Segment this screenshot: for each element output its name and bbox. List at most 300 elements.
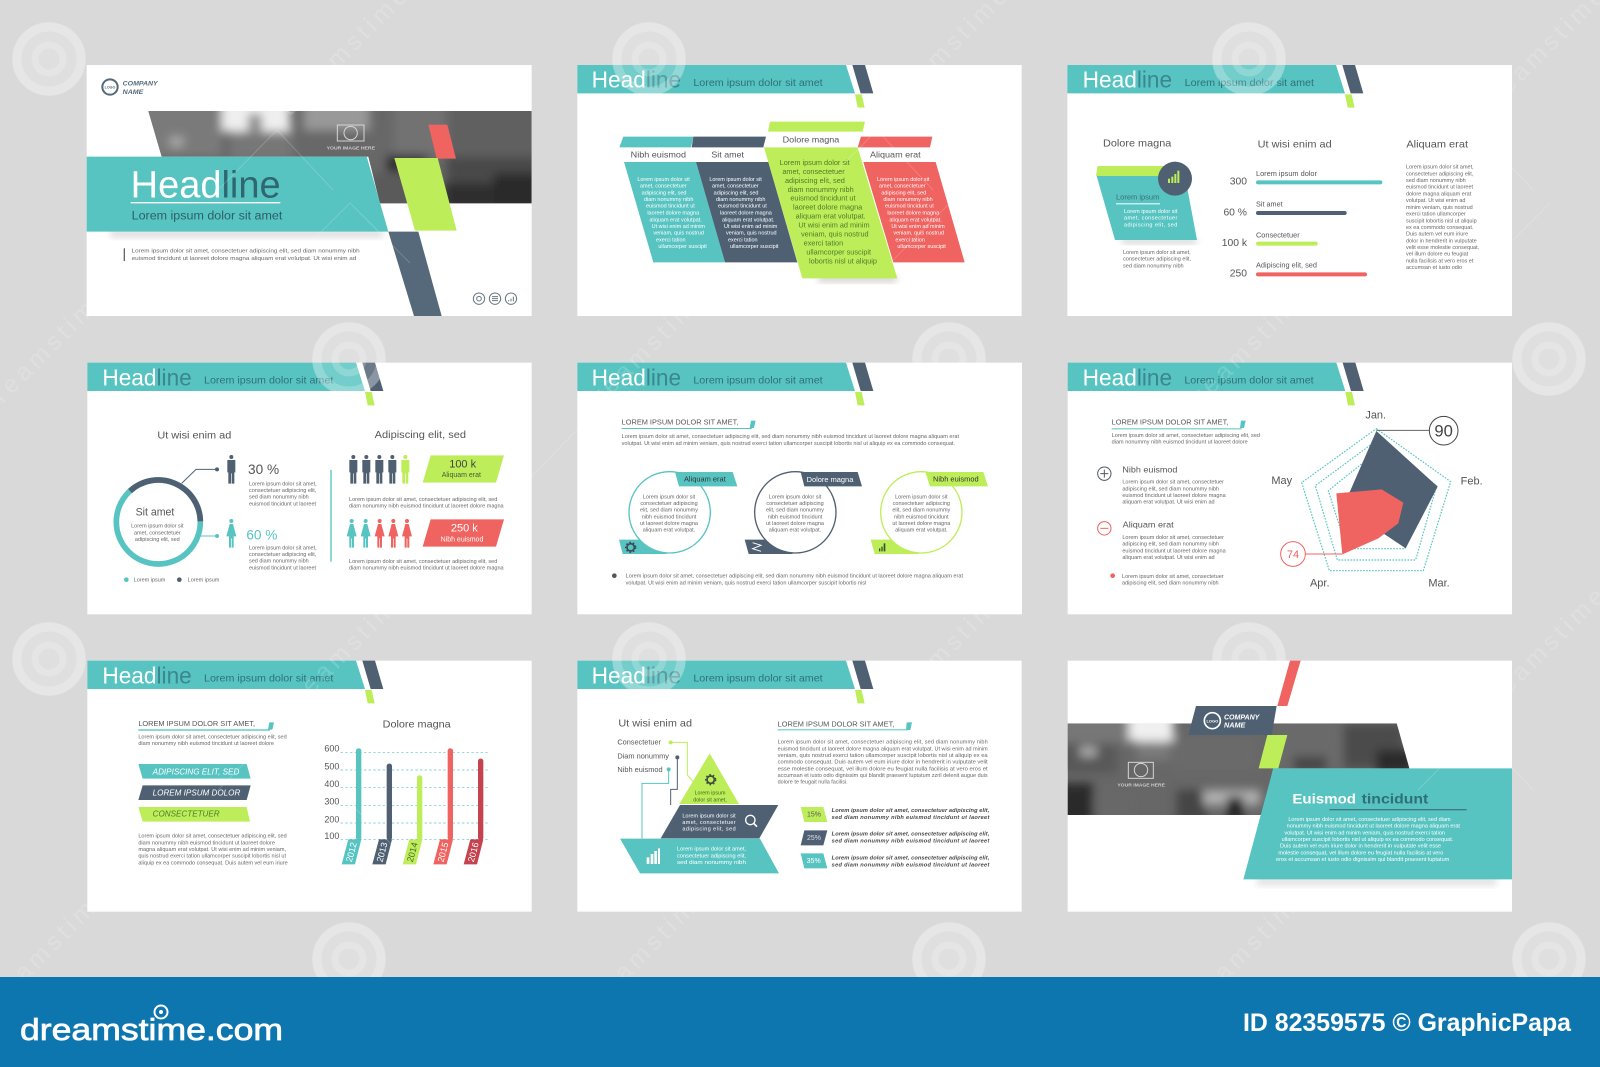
body text: Lorem ipsum dolor sit amet, consectetuer adipiscing elit, sed diam nonummy nibh bbox=[778, 740, 988, 746]
item: minus: Lorem ipsum dolor sit amet, consectetuer bbox=[1122, 535, 1224, 541]
body text column: consectetuer adipiscing elit, bbox=[1406, 171, 1474, 177]
header: Headline bbox=[592, 364, 681, 390]
body text bbox=[138, 834, 288, 866]
bullet note: adipiscing elit, sed diam nonummy nibh bbox=[1122, 581, 1219, 587]
column: green highlighted: euismod tincidunt ut bbox=[790, 194, 856, 203]
logo: company name bbox=[102, 79, 158, 96]
icon row: males bbox=[349, 455, 409, 484]
logo tag bbox=[1188, 706, 1277, 735]
column: dark: ullamcorper suscipit bbox=[730, 244, 779, 250]
circle card: green: Lorem ipsum dolor sit bbox=[895, 494, 948, 500]
footnote bbox=[612, 573, 963, 587]
donut center text: adipiscing elit, sed bbox=[135, 537, 180, 543]
body text: accumsan et iusto odio dignissim qui blandit praesent luptatum zzril delenit augue duis bbox=[778, 773, 988, 779]
circle card: teal bbox=[619, 472, 737, 554]
header bbox=[577, 661, 873, 703]
column: green highlighted: ullamcorper suscipit bbox=[806, 247, 871, 256]
icon: male figure 30% bbox=[227, 455, 235, 484]
text under males bbox=[349, 497, 505, 510]
header bbox=[577, 65, 873, 108]
headings: Dolore magna bbox=[1103, 139, 1172, 150]
photo placeholder bbox=[148, 111, 532, 204]
icons: three round badges bbox=[473, 293, 517, 304]
column: dark: Ut wisi enim ad minim bbox=[724, 224, 778, 230]
callout: 250 k: 250 k bbox=[451, 523, 478, 535]
circle card: dark: elit, sed diam nonummy bbox=[766, 508, 824, 514]
headings: Ut wisi enim ad bbox=[1258, 140, 1332, 151]
bar chart: 400 bbox=[324, 779, 339, 789]
panel: pyramid slide bbox=[577, 661, 1022, 912]
header: Headline bbox=[1083, 364, 1172, 390]
text under females: Lorem ipsum dolor sit amet, consectetuer adipiscing elit, sed bbox=[349, 559, 497, 565]
column: teal: veniam, quis nostrud bbox=[653, 231, 704, 237]
section heading: LOREM IPSUM DOLOR SIT AMET, bbox=[138, 719, 255, 728]
body text column: dolore magna aliquam erat bbox=[1406, 191, 1472, 197]
column: red: euismod tincidunt ut bbox=[885, 204, 934, 210]
donut center text: Sit amet bbox=[136, 507, 174, 519]
radar chart: 74 bbox=[1287, 549, 1299, 561]
footer credit: ID 82359575 © GraphicPapa bbox=[1243, 1009, 1572, 1037]
headings: Ut wisi enim ad bbox=[157, 430, 232, 441]
header: Headline bbox=[102, 662, 192, 688]
circle card: teal: aliquam erat volutpat. bbox=[643, 528, 696, 534]
item: plus: aliquam erat volutpat. Ut wisi enim ad bbox=[1122, 500, 1215, 506]
percent row 35%: sed diam nonummy nibh euismod tincidunt ut laoreet bbox=[832, 862, 990, 868]
teal headline band bbox=[87, 157, 388, 232]
percent row 35%: Lorem ipsum dolor sit amet, consectetuer adipiscing elit, bbox=[832, 855, 990, 861]
pyramid middle bbox=[661, 805, 778, 838]
pyramid labels: Nibh euismod bbox=[617, 765, 663, 774]
circle card: dark: Lorem ipsum dolor sit bbox=[769, 494, 822, 500]
ribbon labels: CONSECTETUER bbox=[153, 808, 220, 818]
header: Headline bbox=[592, 662, 681, 688]
column labels: Nibh euismod bbox=[631, 150, 686, 160]
pyramid labels: Consectetuer bbox=[617, 737, 661, 746]
header: Lorem ipsum dolor sit amet bbox=[693, 674, 823, 685]
donut center text: amet, consectetuer bbox=[134, 530, 181, 536]
bar chart: 250 bbox=[1230, 269, 1247, 280]
radar chart: May bbox=[1271, 475, 1293, 487]
icon: camera: YOUR IMAGE HERE bbox=[327, 146, 375, 151]
column: dark: euismod tincidunt ut bbox=[718, 204, 767, 210]
footnote: Lorem ipsum dolor sit amet, consectetuer adipiscing elit, sed diam nonummy nibh euismod tincidunt ut laoreet dolore magna aliquam erat bbox=[626, 574, 963, 580]
teal panel: Lorem ipsum dolor sit amet, consectetuer adipiscing elit, sed diam bbox=[1288, 817, 1451, 823]
body text: dolore te feugait nulla facilisi. bbox=[778, 780, 848, 786]
column: red: Lorem ipsum dolor sit bbox=[877, 177, 930, 183]
item: minus bbox=[1098, 520, 1227, 561]
panel: progress bars slide bbox=[1067, 65, 1512, 316]
header: Headline bbox=[1083, 67, 1172, 93]
column: teal: Lorem ipsum dolor sit bbox=[637, 177, 690, 183]
text under females: diam nonummy nibh euismod tincidunt ut laoreet dolore magna bbox=[349, 566, 505, 572]
panel: closing slide bbox=[1057, 661, 1512, 912]
circle card: green: aliquam erat volutpat. bbox=[895, 528, 948, 534]
bullet note bbox=[1110, 573, 1224, 587]
percent row 25%: Lorem ipsum dolor sit amet, consectetuer adipiscing elit, bbox=[832, 832, 990, 838]
radar chart bbox=[1271, 409, 1483, 590]
callout card: adipiscing elit, sed bbox=[1124, 222, 1177, 228]
connector lines bbox=[642, 740, 693, 838]
teal panel: Duis autem vel eum iriure dolor in hendrerit in vulputate velit esse bbox=[1280, 844, 1441, 850]
circle card: dark bbox=[745, 472, 862, 554]
column labels bbox=[631, 135, 921, 160]
column: red: amet, consectetuer bbox=[879, 184, 926, 190]
bar chart: 200 bbox=[324, 814, 339, 824]
column: green highlighted: laoreet dolore magna bbox=[793, 203, 863, 212]
body text column: ex ea commodo consequat. bbox=[1406, 225, 1474, 231]
donut chart bbox=[116, 467, 219, 564]
intro text: Lorem ipsum dolor sit amet, consectetuer adipiscing elit, sed diam nonummy nibh euismod tincidunt ut laoreet dolore magna aliquam erat bbox=[622, 434, 959, 440]
bar chart: 2015 bbox=[436, 841, 450, 863]
circle card: dark: nibh euismod tincidunt bbox=[768, 514, 823, 520]
section heading: LOREM IPSUM DOLOR SIT AMET, bbox=[1112, 418, 1228, 427]
radar chart: Mar. bbox=[1428, 578, 1450, 590]
vertical divider bbox=[330, 470, 332, 562]
note text: sed diam nonummy nibh bbox=[1123, 263, 1184, 269]
body text column: Duis autem vel eum iriure bbox=[1406, 232, 1468, 238]
body text: Lorem ipsum dolor sit amet, consectetuer adipiscing elit, sed bbox=[138, 834, 287, 840]
header bbox=[577, 363, 873, 405]
callout card: Lorem ipsum bbox=[1116, 195, 1160, 202]
column: green highlighted: adipiscing elit, sed bbox=[785, 176, 845, 185]
pyramid bottom: consectetuer adipiscing elit, bbox=[677, 853, 746, 859]
text under males: diam nonummy nibh euismod tincidunt ut laoreet dolore magna bbox=[349, 504, 505, 510]
column: green highlighted: exerci tation bbox=[804, 238, 843, 247]
column labels: Sit amet bbox=[711, 150, 745, 160]
item: minus: euismod tincidunt ut laoreet dolore magna bbox=[1122, 548, 1227, 554]
column: teal: exerci tation bbox=[656, 237, 686, 243]
footnote: volutpat. Ut wisi enim ad minim veniam, quis nostrud exerci tation ullamcorper suscipit lobortis nisl bbox=[626, 581, 866, 587]
logo tag: LOGO bbox=[1206, 718, 1218, 723]
body text column: exerci tation ullamcorper bbox=[1406, 212, 1466, 218]
column: green highlighted: diam nonummy nibh bbox=[788, 185, 854, 194]
column: teal: diam nonummy nibh bbox=[644, 197, 693, 203]
radar chart: Feb. bbox=[1461, 475, 1483, 487]
body text: aliquip ex ea commodo consequat. Duis autem vel eum iriure bbox=[138, 860, 288, 866]
body text: diam nonummy nibh euismod tincidunt ut laoreet dolore bbox=[138, 840, 275, 846]
percent row 35% bbox=[801, 853, 990, 868]
column: red: diam nonummy nibh bbox=[883, 197, 933, 203]
callout: 100 k bbox=[423, 455, 504, 483]
pyramid labels: Diam nonummy bbox=[617, 752, 669, 761]
icon: female figure 60% bbox=[226, 519, 236, 548]
callout card: Lorem ipsum dolor sit bbox=[1124, 209, 1178, 215]
section heading: LOREM IPSUM DOLOR SIT AMET, bbox=[778, 719, 894, 728]
column labels: Aliquam erat bbox=[870, 150, 921, 160]
header: Lorem ipsum dolor sit amet bbox=[693, 78, 823, 89]
bar chart: Adipiscing elit, sed bbox=[1256, 263, 1317, 270]
chart heading: Dolore magna bbox=[383, 720, 451, 731]
green accent bbox=[394, 158, 457, 231]
circle card: dark: aliquam erat volutpat. bbox=[769, 528, 822, 534]
callout card: amet, consectetuer bbox=[1124, 216, 1178, 222]
column: red: veniam, quis nostrud bbox=[893, 231, 944, 237]
bar chart: 100 k bbox=[1222, 238, 1248, 249]
card shadow bbox=[1122, 239, 1197, 243]
bar chart: 2016 bbox=[466, 841, 481, 863]
icon: camera: YOUR IMAGE HERE bbox=[1117, 783, 1165, 788]
radar chart: 90 bbox=[1434, 422, 1453, 441]
panel: four column slide bbox=[577, 65, 1022, 316]
item: plus bbox=[1098, 464, 1227, 506]
legend: Lorem ipsum bbox=[134, 578, 166, 584]
column: teal bbox=[624, 162, 725, 262]
footer band bbox=[0, 977, 1600, 1067]
red accent bbox=[1277, 661, 1301, 706]
watermark overlay: dreamstime bbox=[274, 583, 413, 721]
headings: Aliquam erat bbox=[1406, 140, 1468, 151]
header: Headline bbox=[592, 67, 681, 93]
logo: company name: COMPANY bbox=[123, 80, 158, 87]
circle card: dark: Dolore magna bbox=[807, 475, 854, 484]
panel: people statistics slide bbox=[87, 363, 532, 614]
watermark overlay: dreamstime bbox=[574, 283, 713, 421]
icon row: females bbox=[347, 519, 412, 548]
header bbox=[1067, 65, 1363, 108]
stat 60% bbox=[246, 527, 317, 571]
dark diagonal stripe bbox=[388, 232, 442, 316]
bar chart: 300 bbox=[1230, 177, 1247, 188]
section heading: LOREM IPSUM DOLOR SIT AMET, bbox=[622, 418, 738, 427]
headings bbox=[157, 430, 466, 441]
item: minus: adipiscing elit, sed diam nonummy nibh bbox=[1122, 542, 1219, 548]
circle card: teal: Lorem ipsum dolor sit bbox=[643, 494, 696, 500]
column: dark: veniam, quis nostrud bbox=[726, 231, 777, 237]
intro text: Lorem ipsum dolor sit amet, consectetuer adipiscing elit, sed bbox=[138, 734, 287, 740]
percent row 15%: sed diam nonummy nibh euismod tincidunt ut laoreet bbox=[832, 815, 990, 821]
percent row 15%: 15% bbox=[807, 812, 821, 819]
intro text: diam nonummy nibh euismod tincidunt ut laoreet dolore bbox=[138, 741, 274, 747]
item: plus: euismod tincidunt ut laoreet dolore magna bbox=[1122, 493, 1227, 499]
green accent bbox=[1259, 735, 1287, 768]
teal panel: nonummy nibh euismod tincidunt ut laoreet dolore magna aliquam erat bbox=[1287, 824, 1460, 830]
bar chart: 300 bbox=[324, 797, 339, 807]
header: Lorem ipsum dolor sit amet bbox=[1185, 78, 1314, 89]
text under females bbox=[349, 559, 505, 572]
percent row 15% bbox=[801, 807, 990, 822]
column: teal: euismod tincidunt ut bbox=[646, 204, 695, 210]
panel: column chart slide bbox=[87, 661, 532, 912]
column shadow bbox=[818, 276, 897, 282]
column: red bbox=[863, 162, 965, 262]
body text: esse molestie consequat, vel illum dolore eu feugiat nulla facilisis at vero eros et bbox=[778, 766, 988, 772]
photo placeholder bbox=[1068, 723, 1410, 815]
ribbon labels: LOREM IPSUM DOLOR bbox=[153, 788, 240, 798]
intro text bbox=[1112, 433, 1260, 446]
footer logo: dreamstime.com bbox=[20, 1012, 283, 1047]
bar chart: 500 bbox=[324, 761, 339, 771]
title: Headline bbox=[131, 164, 281, 206]
circle card: teal: elit, sed diam nonummy bbox=[640, 508, 698, 514]
header: Headline bbox=[102, 364, 192, 390]
circle card: dark: ut laoreet dolore magna bbox=[766, 521, 825, 527]
stat 30% bbox=[248, 462, 317, 507]
intro text bbox=[124, 248, 360, 262]
circle card: green bbox=[871, 472, 988, 554]
column: teal: ullamcorper suscipit bbox=[658, 244, 707, 250]
bar chart: Sit amet bbox=[1256, 202, 1283, 209]
pyramid bottom: Lorem ipsum dolor sit amet, bbox=[677, 847, 746, 853]
column: green highlighted: Ut wisi enim ad minim bbox=[798, 221, 870, 230]
intro text: volutpat. Ut wisi enim ad minim veniam, quis nostrud exerci tation ullamcorper suscipit lobortis nisl ut aliquip ex ea commodo consequat. bbox=[622, 441, 955, 447]
body text column: euismod tincidunt ut laoreet bbox=[1406, 185, 1474, 191]
panel: cover slide bbox=[87, 65, 540, 316]
note text bbox=[1123, 250, 1191, 269]
intro text: euismod tincidunt ut laoreet dolore magna aliquam erat volutpat. Ut wisi enim ad bbox=[132, 256, 356, 262]
header: Lorem ipsum dolor sit amet bbox=[204, 376, 333, 387]
teal panel: tincidunt bbox=[1362, 790, 1429, 806]
column: green highlighted: veniam, quis nostrud bbox=[801, 230, 869, 239]
body text column: minim veniam, quis nostrud bbox=[1406, 205, 1473, 211]
callout: 100 k: Aliquam erat bbox=[442, 472, 481, 479]
column: dark: amet, consectetuer bbox=[712, 184, 759, 190]
red accent bbox=[428, 125, 456, 159]
stat 60%: 60 % bbox=[246, 527, 277, 542]
body text: euismod tincidunt ut laoreet dolore magna aliquam erat volutpat. Ut wisi enim ad minim bbox=[778, 746, 988, 752]
item: plus: Lorem ipsum dolor sit amet, consectetuer bbox=[1122, 480, 1224, 486]
circle card: green: consectetuer adipiscing bbox=[893, 501, 950, 507]
subtitle: Lorem ipsum dolor sit amet bbox=[132, 208, 283, 222]
column heads strips bbox=[619, 122, 932, 147]
column: red: laoreet dolore magna bbox=[887, 211, 940, 217]
body text column: nulla facilisis at vero eros et bbox=[1406, 258, 1474, 264]
bar chart: 600 bbox=[324, 744, 339, 754]
percent row 35%: 35% bbox=[807, 858, 821, 865]
column: dark: Lorem ipsum dolor sit bbox=[709, 177, 762, 183]
stat 30%: consectetuer adipiscing elit, bbox=[249, 488, 317, 494]
title underline bbox=[131, 202, 280, 203]
circle card: teal: consectetuer adipiscing bbox=[640, 501, 698, 507]
ribbon labels: ADIPISCING ELIT, SED bbox=[152, 767, 239, 777]
body text: commodo consequat. Duis autem vel eum iriure dolor in hendrerit in vulputate velit bbox=[778, 760, 988, 766]
column: teal: aliquam erat volutpat. bbox=[649, 217, 702, 223]
watermark overlay: dreamstime bbox=[574, 883, 713, 1021]
header bbox=[87, 363, 383, 405]
circle card: teal: Aliquam erat bbox=[684, 474, 726, 483]
section heading bbox=[1112, 418, 1246, 429]
section heading bbox=[138, 719, 274, 731]
note text: consectetuer adipiscing elit, bbox=[1123, 257, 1191, 263]
pyramid labels bbox=[617, 737, 669, 774]
heading: Ut wisi enim ad bbox=[618, 719, 692, 730]
column: green highlighted: Lorem ipsum dolor sit bbox=[780, 158, 850, 167]
intro text bbox=[622, 434, 959, 447]
panel: three circles slide bbox=[577, 363, 1022, 614]
bar chart: 60 % bbox=[1223, 207, 1247, 218]
column: dark: laoreet dolore magna bbox=[720, 211, 773, 217]
pyramid top: dolor sit amet, bbox=[693, 797, 727, 803]
body text: magna aliquam erat volutpat. Ut wisi enim ad minim veniam, bbox=[138, 847, 286, 853]
header bbox=[1068, 363, 1364, 405]
teal panel: eros et accumsan et iusto odio dignissim qui blandit praesent luptatum bbox=[1276, 857, 1450, 863]
intro text: diam nonummy nibh euismod tincidunt ut laoreet dolore bbox=[1112, 440, 1248, 446]
column: dark: diam nonummy nibh bbox=[716, 197, 765, 203]
body text: quis nostrud exerci tation ullamcorper suscipit lobortis nisl ut bbox=[138, 854, 286, 860]
column labels: Dolore magna bbox=[783, 135, 840, 145]
circle card: teal: nibh euismod tincidunt bbox=[642, 514, 697, 520]
stat 60%: euismod tincidunt ut laoreet bbox=[249, 565, 317, 571]
bar chart bbox=[1222, 171, 1382, 280]
pyramid middle: adipiscing elit, sed bbox=[682, 827, 736, 833]
pyramid middle: amet, consectetuer bbox=[682, 820, 736, 826]
intro text bbox=[138, 734, 287, 747]
column: green highlighted: aliquam erat volutpat. bbox=[796, 212, 866, 221]
radar chart: Apr. bbox=[1310, 578, 1330, 590]
stat 30%: sed diam nonummy nibh bbox=[249, 495, 309, 501]
percent row 15%: Lorem ipsum dolor sit amet, consectetuer adipiscing elit, bbox=[832, 808, 990, 814]
callout card bbox=[1096, 166, 1197, 240]
column: green highlighted: amet, consectetuer bbox=[782, 167, 845, 176]
header: Lorem ipsum dolor sit amet bbox=[693, 376, 823, 387]
intro text: Lorem ipsum dolor sit amet, consectetuer adipiscing elit, sed diam nonummy nibh bbox=[132, 248, 360, 254]
item: plus: Nibh euismod bbox=[1122, 464, 1178, 474]
bar chart: 2013 bbox=[375, 841, 389, 863]
column: teal: amet, consectetuer bbox=[640, 184, 687, 190]
body text column: suscipit lobortis nisl ut aliquip bbox=[1406, 218, 1477, 224]
stat 60%: consectetuer adipiscing elit, bbox=[249, 552, 317, 558]
panel shadow bbox=[1257, 877, 1497, 885]
pyramid middle: Lorem ipsum dolor sit bbox=[682, 813, 736, 819]
pyramid bottom bbox=[620, 839, 779, 873]
body text bbox=[778, 740, 989, 786]
pyramid bottom: sed diam nonummy nibh bbox=[677, 860, 746, 866]
logo: company name: NAME bbox=[123, 89, 144, 96]
stat 30%: 30 % bbox=[248, 462, 279, 477]
column: red: Ut wisi enim ad minim bbox=[891, 224, 945, 230]
bar chart: 2012 bbox=[344, 841, 359, 863]
headings: Adipiscing elit, sed bbox=[375, 430, 466, 441]
circle card: green: Nibh euismod bbox=[933, 475, 979, 484]
stat 60%: sed diam nonummy nibh bbox=[249, 559, 309, 565]
body text column: vel illum dolore eu feugiat bbox=[1406, 252, 1469, 258]
body text column: accumsan et iusto odio bbox=[1406, 265, 1462, 271]
body text column bbox=[1406, 165, 1480, 271]
logo tag: NAME bbox=[1224, 721, 1246, 730]
icon: camera bbox=[327, 125, 375, 151]
column: dark: aliquam erat volutpat. bbox=[722, 217, 775, 223]
item: minus: aliquam erat volutpat. Ut wisi enim ad bbox=[1122, 555, 1215, 561]
bar chart: Consectetuer bbox=[1256, 232, 1300, 239]
circle card: green: ut laoreet dolore magna bbox=[892, 521, 951, 527]
column: dark: exerci tation bbox=[728, 237, 758, 243]
percent row 25% bbox=[801, 830, 990, 845]
section heading bbox=[622, 418, 756, 429]
icon: chart badge bbox=[1158, 162, 1192, 196]
bar chart bbox=[324, 744, 489, 864]
headings bbox=[1103, 139, 1468, 151]
donut center text: Lorem ipsum dolor sit bbox=[131, 524, 184, 530]
callout: 100 k: 100 k bbox=[449, 458, 477, 470]
teal panel: volutpat. Ut wisi enim ad minim veniam, quis nostrud exerci tation bbox=[1284, 830, 1445, 836]
bullet note: Lorem ipsum dolor sit amet, consectetuer bbox=[1122, 574, 1224, 580]
column: dark bbox=[696, 162, 797, 262]
legend: Lorem ipsum bbox=[188, 578, 220, 584]
body text column: Lorem ipsum dolor sit amet, bbox=[1406, 165, 1474, 171]
circle card: green: elit, sed diam nonummy bbox=[892, 508, 951, 514]
teal panel: ullamcorper suscipit lobortis nisl ut aliquip ex ea commodo consequat. bbox=[1282, 837, 1454, 843]
column: teal: laoreet dolore magna bbox=[647, 211, 700, 217]
circle card: green: nibh euismod tincidunt bbox=[894, 514, 949, 520]
percent row 25%: sed diam nonummy nibh euismod tincidunt ut laoreet bbox=[832, 839, 990, 845]
bar chart: Lorem ipsum dolor bbox=[1256, 171, 1318, 178]
column: red: adipiscing elit, sed bbox=[881, 190, 926, 196]
header: Lorem ipsum dolor sit amet bbox=[204, 674, 333, 685]
column: teal: adipiscing elit, sed bbox=[642, 190, 686, 196]
ribbon labels bbox=[138, 764, 251, 822]
circle card: teal: ut laoreet dolore magna bbox=[640, 521, 699, 527]
body text column: velit esse molestie consequat, bbox=[1406, 245, 1480, 251]
teal panel bbox=[1243, 768, 1512, 879]
